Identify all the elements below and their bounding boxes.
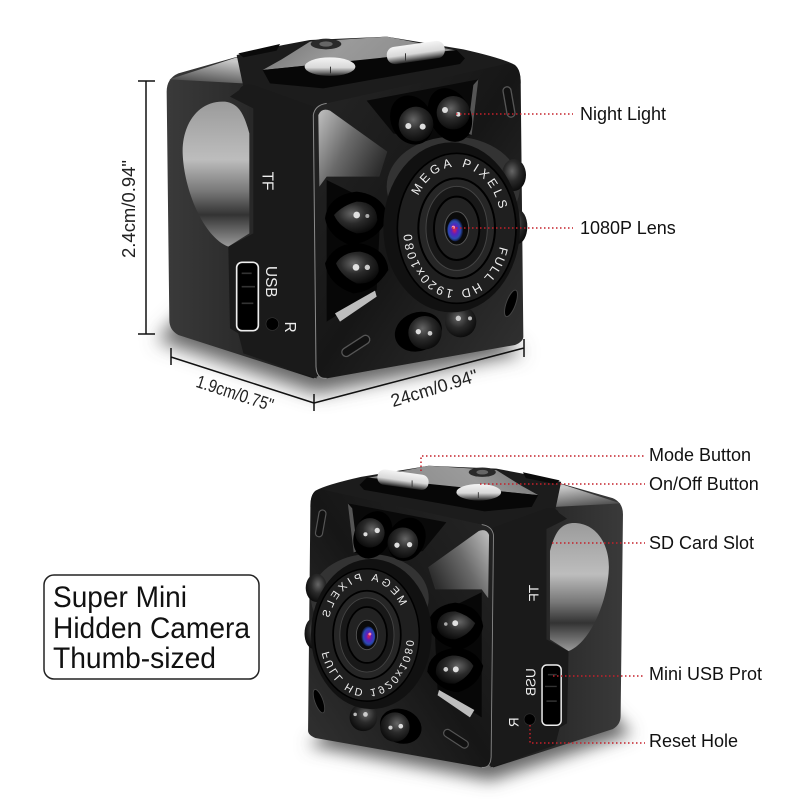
camera: lower view, mirrored — [304, 466, 638, 792]
dimension: width — [314, 339, 524, 411]
camera: lower view, mirrored: MEGA PIXELS — [322, 574, 407, 617]
title box: Super Mini Hidden Camera Thumb-sized: Super Mini — [53, 581, 187, 614]
dimension: depth — [171, 348, 314, 415]
callout: on/off button: On/Off Button — [649, 474, 759, 494]
camera: top view with dimensions — [150, 36, 528, 406]
camera: top view with dimensions: FULL HD 1920x1080 — [404, 234, 508, 298]
callout: reset hole: Reset Hole — [649, 731, 738, 751]
title box: Super Mini Hidden Camera Thumb-sized: Hidden Camera — [53, 612, 251, 645]
camera: lower view, mirrored: FULL HD 1920x1080 — [322, 640, 414, 696]
camera: top view with dimensions: USB — [262, 266, 279, 298]
dimension: width: 24cm/0.94" — [388, 366, 480, 411]
callout: reset hole — [530, 725, 738, 751]
dimension: height: 2.4cm/0.94" — [119, 160, 139, 258]
camera: top view with dimensions: TF — [258, 172, 275, 190]
camera: lower view, mirrored: TF — [527, 585, 542, 601]
dimension: height — [119, 81, 155, 334]
title box: Super Mini Hidden Camera Thumb-sized — [44, 575, 259, 679]
callout: SD card slot: SD Card Slot — [649, 533, 754, 553]
title box: Super Mini Hidden Camera Thumb-sized: Thumb-sized — [53, 642, 216, 675]
callout: mini USB port: Mini USB Prot — [649, 664, 762, 684]
dimension: depth: 1.9cm/0.75" — [194, 371, 276, 415]
callout: night light: Night Light — [580, 104, 666, 124]
camera: lower view, mirrored: USB — [523, 668, 538, 696]
camera: lower view, mirrored: R — [506, 717, 521, 727]
callout: mode button — [421, 445, 751, 471]
camera: top view with dimensions: R — [281, 322, 298, 333]
callout: 1080P lens: 1080P Lens — [580, 218, 676, 238]
callout: mode button: Mode Button — [649, 445, 751, 465]
camera: top view with dimensions: MEGA PIXELS — [411, 158, 507, 208]
